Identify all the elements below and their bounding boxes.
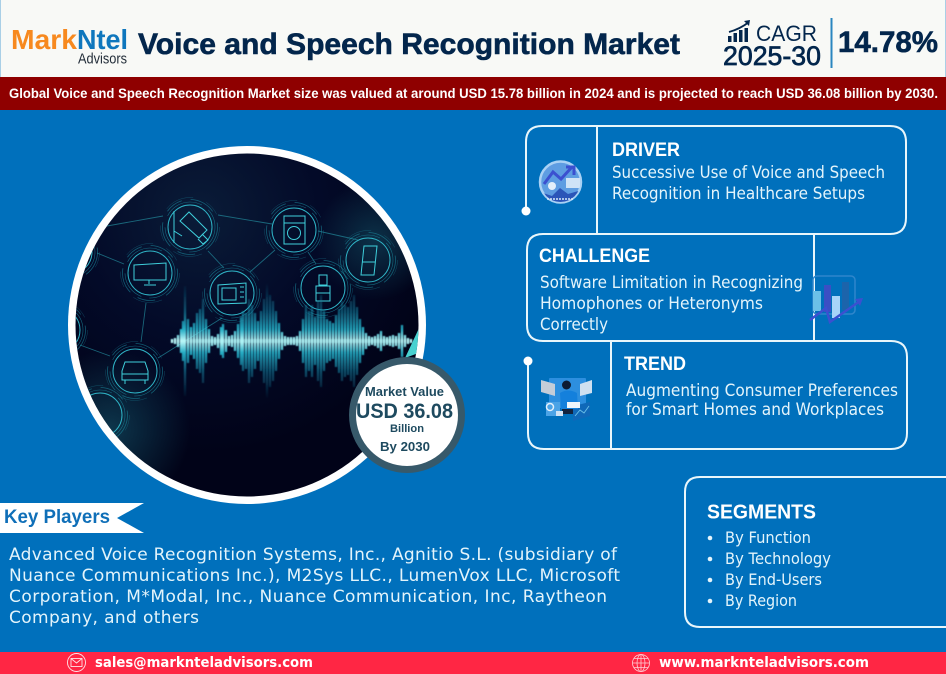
logo: MarkNtel Advisors: Mark <box>11 24 77 55</box>
challenge text: CHALLENGE <box>539 246 650 267</box>
trend text: TREND <box>624 354 686 375</box>
icon: kitchen appliance <box>294 258 352 318</box>
icon: security camera <box>160 198 220 256</box>
key players list: Corporation, M*Modal, Inc., Nuance Communication, Inc, Raytheon <box>9 587 607 607</box>
key players ribbon <box>0 503 144 533</box>
footer band: sales@marknteladvisors.com <box>95 655 313 671</box>
waveform <box>170 283 415 399</box>
market value badge: Market Value <box>365 384 444 399</box>
footer band <box>0 652 946 674</box>
driver text: Recognition in Healthcare Setups <box>612 184 865 203</box>
CAGR block: CAGR <box>756 21 817 46</box>
trend text: for Smart Homes and Workplaces <box>626 400 884 419</box>
panel: driver <box>522 126 906 234</box>
market value badge: USD 36.08 <box>356 400 453 423</box>
trend text: Augmenting Consumer Preferences <box>626 381 898 400</box>
partial device rings at edge <box>76 246 130 437</box>
driver text: Successive Use of Voice and Speech <box>612 163 885 182</box>
segment list <box>708 528 831 610</box>
title: Voice and Speech Recognition Market <box>138 28 680 61</box>
CAGR block: 14.78% <box>838 26 938 59</box>
icon: television <box>120 244 180 302</box>
icon: growth chart <box>728 20 750 42</box>
summary banner: Global Voice and Speech Recognition Market size was valued at around USD 15.78 billion in 2024 and is projected to reach USD 36.08 billion by 2030. <box>9 86 938 101</box>
header band <box>0 0 946 77</box>
photo circle: voice waveform and connected devices <box>68 146 426 504</box>
CAGR block: 2025-30 <box>723 41 821 71</box>
key players list: Company, and others <box>9 608 199 628</box>
icon: car <box>106 342 164 400</box>
icon: person with screens <box>541 378 592 421</box>
summary banner <box>0 77 946 110</box>
trend text <box>624 354 898 419</box>
teal accent <box>405 330 418 358</box>
icon: refrigerator <box>338 230 398 290</box>
icon: driver globe <box>540 162 582 204</box>
panel: segments <box>685 477 946 627</box>
key players ribbon: Key Players <box>4 507 110 528</box>
segment list: By Function <box>725 528 811 547</box>
logo: MarkNtel Advisors <box>11 24 128 68</box>
driver text <box>612 140 885 203</box>
footer band: www.marknteladvisors.com <box>659 655 869 671</box>
panel: segments: SEGMENTS <box>707 502 816 524</box>
panel: challenge <box>527 234 863 341</box>
network lines <box>80 215 358 358</box>
CAGR block <box>723 18 938 71</box>
logo: MarkNtel Advisors: Ntel <box>77 24 128 55</box>
challenge text: Correctly <box>540 315 608 334</box>
challenge text: Software Limitation in Recognizing <box>540 273 803 292</box>
challenge text: Homophones or Heteronyms <box>540 294 763 313</box>
segment list: By Region <box>725 591 797 610</box>
key players list <box>9 545 620 628</box>
icon: email <box>68 654 86 672</box>
segment list: By End-Users <box>725 570 822 589</box>
key players list: Nuance Communications Inc.), M2Sys LLC., LumenVox LLC, Microsoft <box>9 566 620 586</box>
segment list: By Technology <box>725 549 831 568</box>
key players list: Advanced Voice Recognition Systems, Inc., Agnitio S.L. (subsidiary of <box>9 545 618 565</box>
driver text: DRIVER <box>612 140 680 161</box>
icon: microwave <box>202 264 262 322</box>
logo: MarkNtel Advisors: Advisors <box>78 50 127 68</box>
icon: challenge bar chart <box>810 276 863 322</box>
market value badge: By 2030 <box>380 440 430 454</box>
market value badge: Billion <box>390 423 424 435</box>
icon: globe <box>632 654 650 672</box>
market value badge <box>352 360 462 470</box>
icon: washing machine <box>264 200 324 260</box>
panel: trend <box>524 341 907 449</box>
challenge text <box>539 246 803 334</box>
